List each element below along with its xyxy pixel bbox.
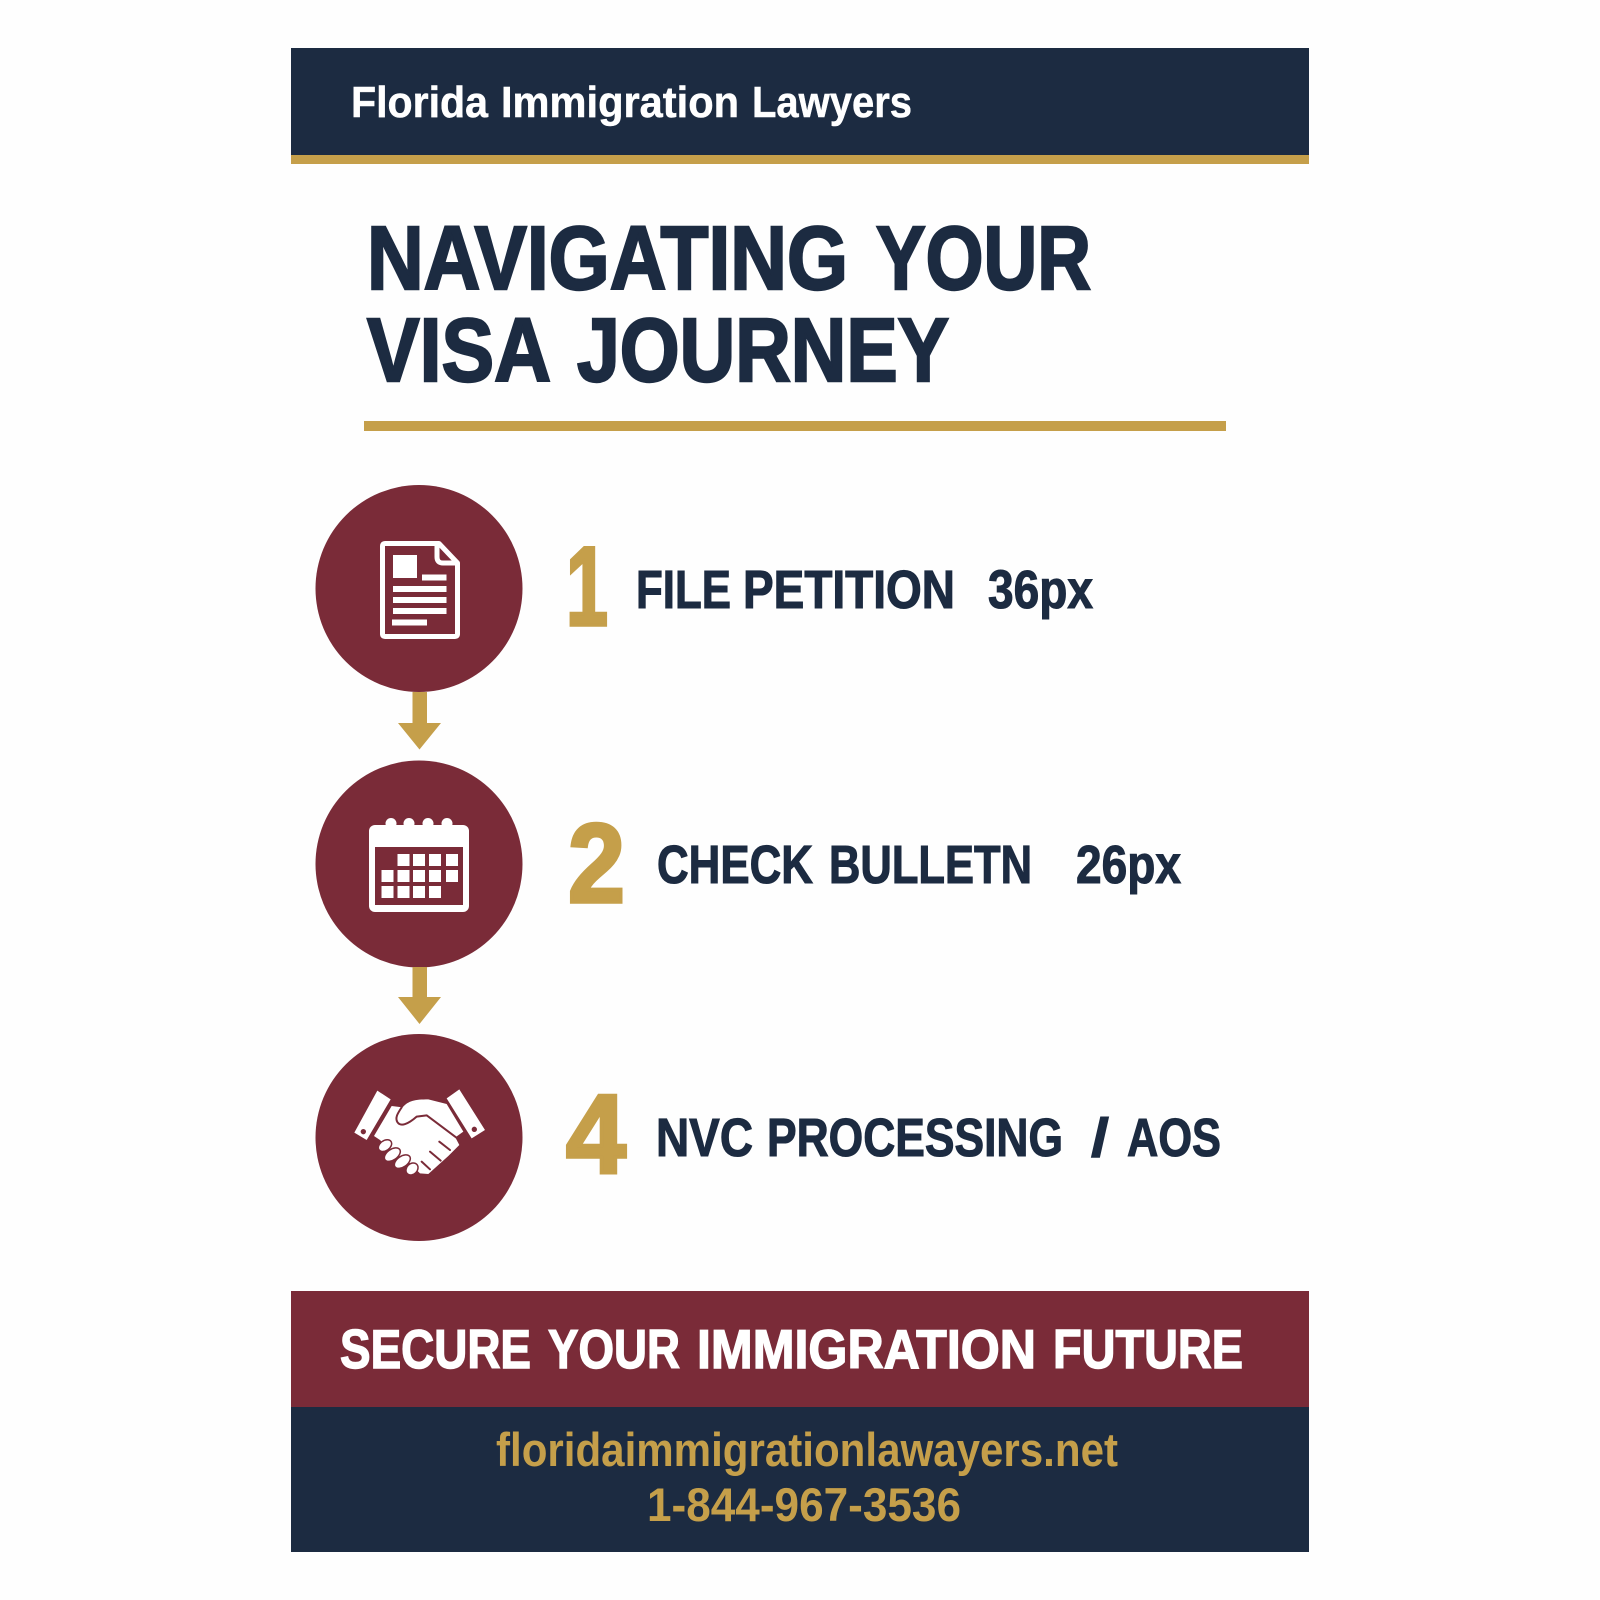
step 3 label: /: [1091, 1108, 1109, 1168]
firm name: Florida: [351, 78, 488, 127]
firm name: Lawyers: [752, 78, 912, 127]
step 2 label: [657, 835, 1181, 895]
title: NAVIGATING: [367, 209, 848, 309]
title: YOUR: [876, 209, 1091, 309]
icon: document: [382, 544, 458, 636]
step 1 circle with document icon: [316, 485, 522, 692]
step 2 number: 2: [568, 801, 625, 926]
phone: 1-844-967-3536: [647, 1478, 961, 1531]
arrow: step 2 to step 3: [398, 967, 441, 1024]
call to action text: FUTURE: [1053, 1318, 1243, 1380]
step 1 number: 1: [566, 524, 608, 649]
call to action text: SECURE: [340, 1318, 531, 1380]
step 3 circle with handshake icon: [316, 1034, 522, 1241]
title: JOURNEY: [577, 301, 949, 401]
icon: handshake: [354, 1089, 485, 1177]
call to action text: [340, 1318, 1243, 1380]
step 1 label: PETITION: [743, 560, 955, 620]
firm name: Immigration: [501, 78, 739, 127]
title rule: [364, 421, 1226, 431]
arrow: step 1 to step 2: [398, 692, 441, 750]
step 3 label: [656, 1108, 1221, 1168]
step 2 label: BULLETN: [829, 835, 1032, 895]
call to action band: [291, 1291, 1309, 1408]
step 1 label: [636, 560, 1093, 620]
call to action text: IMMIGRATION: [697, 1318, 1036, 1380]
step 3 label: NVC: [656, 1108, 753, 1168]
step 1 label: 36px: [988, 560, 1093, 620]
step 1 label: FILE: [636, 560, 731, 620]
step 3 number: 4: [566, 1072, 626, 1197]
step 2 label: 26px: [1076, 835, 1181, 895]
header band: [291, 48, 1309, 164]
step 3 label: AOS: [1127, 1108, 1221, 1168]
firm name: [351, 78, 912, 127]
step 2 label: CHECK: [657, 835, 813, 895]
contact band: [291, 1407, 1309, 1552]
title: [367, 209, 1091, 401]
title: VISA: [367, 301, 551, 401]
step 3 label: PROCESSING: [767, 1108, 1063, 1168]
call to action text: YOUR: [548, 1318, 680, 1380]
icon: calendar: [369, 818, 469, 912]
step 2 circle with calendar icon: [316, 760, 522, 968]
website: floridaimmigrationlawayers.net: [496, 1423, 1118, 1476]
